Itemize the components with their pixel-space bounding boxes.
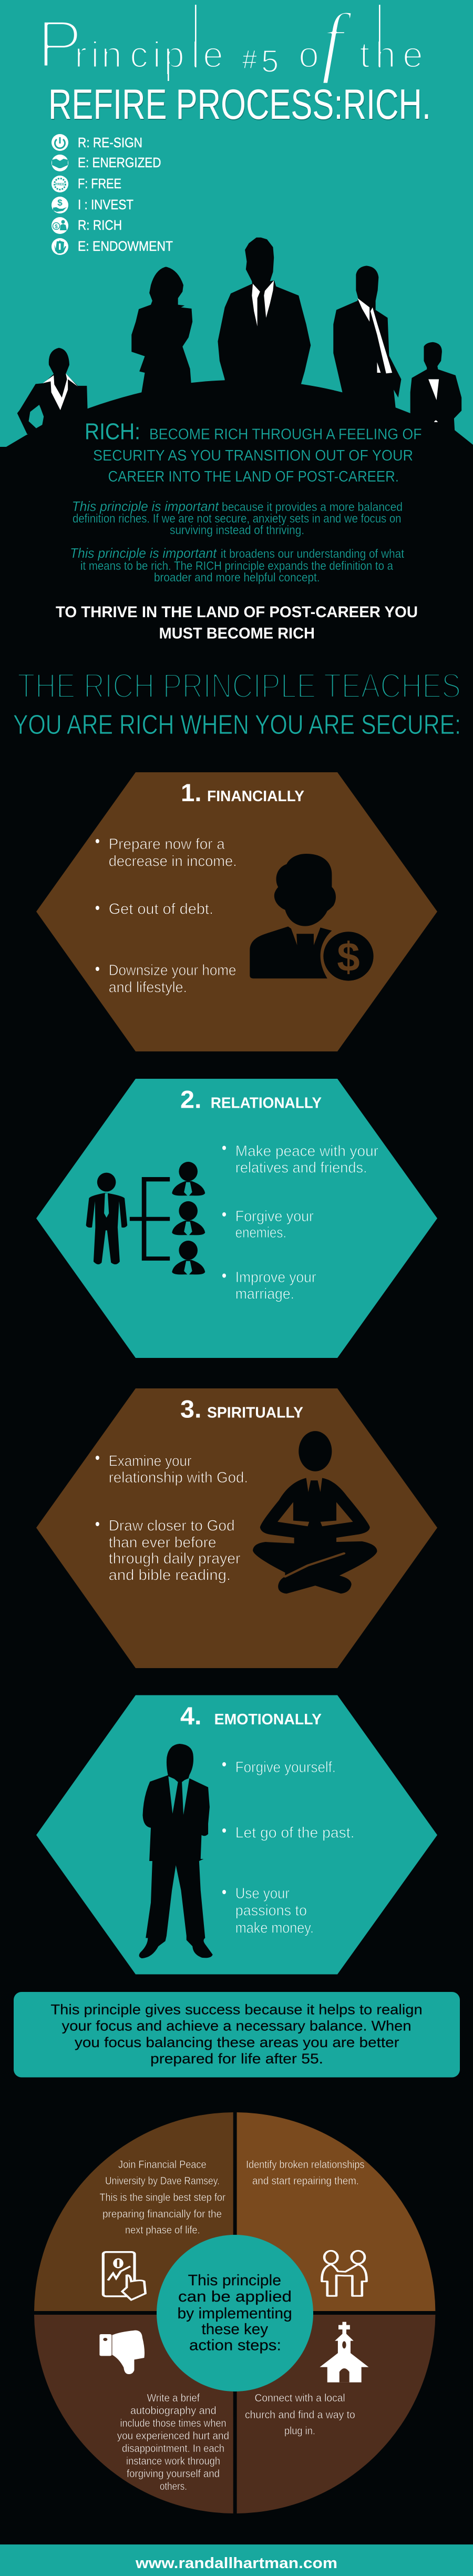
title: Principle #5 of the: n: [101, 34, 122, 75]
paragraph: why important 2: broader and more helpful concept.: [154, 570, 320, 584]
icon: standing businessman: [139, 1744, 213, 1958]
definition of RICH: BECOME RICH THROUGH A FEELING OF: [149, 426, 421, 443]
bullet list: enemies.: [235, 1224, 286, 1241]
bullet list: Downsize your home: [109, 962, 236, 979]
heading: 4.: [180, 1702, 202, 1730]
list item: re-sign: [52, 134, 142, 151]
definition of RICH: CAREER INTO THE LAND OF POST-CAREER.: [108, 468, 399, 485]
callout: gives success: your focus and achieve a necessary balance. When: [62, 2018, 411, 2033]
footer: www.randallhartman.com: [135, 2555, 337, 2572]
quadrant: financial step: next phase of life.: [125, 2225, 200, 2236]
paragraph: why important 1: surviving instead of thriving.: [170, 523, 304, 537]
centre circle: This principle: [188, 2272, 281, 2289]
bold statement: TO THRIVE IN THE LAND OF POST-CAREER YOU: [56, 604, 418, 621]
heading: FINANCIALLY: [207, 788, 304, 805]
bold statement: [56, 604, 418, 642]
definition of RICH: RICH:: [85, 419, 140, 445]
bullet list: [96, 836, 237, 996]
bold statement: MUST BECOME RICH: [159, 625, 315, 642]
paragraph: why important 2: [70, 545, 405, 584]
callout: gives success: you focus balancing these areas you are better: [75, 2035, 399, 2050]
silhouette: man right with white tie: [333, 265, 401, 418]
title: Principle #5 of the: o: [299, 34, 319, 75]
callout: gives success: [14, 1992, 460, 2078]
list item: endowment: [52, 238, 173, 255]
quadrant: financial step: This is the single best step for: [99, 2192, 225, 2204]
bullet list: Prepare now for a: [109, 836, 225, 853]
paragraph: why important 2: This principle is important: [70, 545, 218, 561]
heading: 2.: [180, 1086, 202, 1113]
icon: person meditating: [253, 1431, 377, 1593]
bullet list: Make peace with your: [235, 1143, 378, 1160]
footer: [0, 2544, 473, 2576]
silhouette: woman arms crossed: [131, 267, 192, 400]
title: Principle #5 of the: i: [152, 34, 161, 75]
list item: invest: $: [57, 198, 63, 208]
quadrant: relationship step: and start repairing them.: [252, 2175, 359, 2187]
bullet list: Improve your: [235, 1269, 316, 1286]
paragraph: why important 1: definition riches. If we are not secure, anxiety sets in and we focus on: [73, 512, 402, 525]
title: Principle #5 of the: h: [375, 34, 396, 75]
quadrant: emotional step: instance work through: [126, 2456, 220, 2467]
heading: EMOTIONALLY: [214, 1711, 322, 1728]
icon: church: [320, 2322, 368, 2383]
bullet list: and bible reading.: [109, 1567, 231, 1583]
shirt detail lower right: [434, 421, 438, 422]
quadrant: relationship step: Identify broken relationships: [246, 2159, 365, 2171]
bullet list: and lifestyle.: [109, 979, 187, 996]
panel: 2 relationally: [36, 1079, 437, 1358]
heading: [180, 1395, 303, 1423]
icon: businessman with dollar coin: $: [337, 934, 360, 980]
bullet list: [222, 1759, 354, 1937]
list item: free: F: FREE: [78, 176, 121, 191]
callout: gives success: prepared for life after 55.: [150, 2051, 323, 2067]
bullet list: through daily prayer: [109, 1550, 241, 1567]
title: Principle #5 of the: P: [37, 7, 82, 82]
paragraph: why important 1: because it provides a more balanced: [222, 500, 403, 514]
list item: rich: R: RICH: [78, 217, 122, 233]
bullet list: Let go of the past.: [235, 1824, 354, 1841]
bullet list: marriage.: [235, 1286, 294, 1303]
quadrant: spiritual step: church and find a way to: [245, 2409, 355, 2421]
quadrant: emotional step: disappointment. In each: [122, 2443, 224, 2455]
REFIRE acronym list: [52, 134, 173, 255]
bullet list: relatives and friends.: [235, 1160, 367, 1177]
quadrant: financial step: preparing financially for the: [102, 2209, 222, 2220]
list item: free: FREE: [55, 183, 65, 186]
hexagon: [36, 1388, 437, 1668]
panel: 3 spiritually: [36, 1388, 437, 1668]
list item: invest: [52, 197, 133, 213]
title: Principle #5 of the: c: [130, 34, 148, 75]
quadrant: emotional step: autobiography and: [130, 2405, 217, 2417]
title: Principle #5 of the: e: [203, 34, 223, 75]
definition of RICH: SECURITY AS YOU TRANSITION OUT OF YOUR: [93, 447, 413, 464]
icon: tablet with chart: [103, 2252, 146, 2300]
heading: SPIRITUALLY: [207, 1405, 303, 1422]
bullet list: Forgive your: [235, 1208, 314, 1225]
quadrant: emotional step: forgiving yourself and: [127, 2468, 220, 2480]
title: Principle #5 of the: #: [242, 45, 257, 74]
bullet list: Get out of debt.: [109, 901, 213, 918]
heading: 1.: [181, 779, 202, 806]
definition of RICH: [85, 419, 421, 485]
centre circle: [157, 2235, 313, 2391]
bullet list: passions to: [235, 1903, 307, 1919]
quadrant: financial step: [34, 2112, 233, 2311]
curved ground: [0, 380, 473, 473]
bullet list: Draw closer to God: [109, 1518, 235, 1535]
list item: rich: [52, 217, 122, 234]
business team silhouettes: [0, 238, 473, 473]
bullet list: Forgive yourself.: [235, 1759, 336, 1776]
list item: re-sign: R: RE-SIGN: [78, 135, 142, 150]
title: Principle #5 of the: i: [91, 34, 99, 75]
title: Principle #5 of the: 5: [261, 44, 279, 79]
title: Principle #5 of the: r: [75, 34, 87, 75]
quadrant: emotional step: Write a brief: [147, 2393, 200, 2404]
icon: man connected to three people: [86, 1162, 205, 1275]
title: Principle #5 of the: l: [191, 34, 200, 75]
centre circle: action steps:: [189, 2337, 281, 2354]
bullet list: than ever before: [109, 1534, 217, 1551]
quadrant: spiritual step: Connect with a local: [254, 2393, 345, 2404]
heading: 3.: [180, 1395, 202, 1423]
icon: two people shaking hands: [322, 2251, 366, 2296]
centre circle: by implementing: [178, 2305, 292, 2322]
quadrant: financial step: University by Dave Ramsey.: [105, 2175, 220, 2187]
centre circle: can be applied: [178, 2288, 292, 2305]
quadrant: relationship step: [237, 2112, 435, 2311]
bullet list: Use your: [235, 1885, 290, 1902]
title: Principle #5 of the: [37, 0, 423, 85]
callout: gives success: This principle gives success because it helps to realign: [50, 2001, 423, 2017]
quadrant: emotional step: include those times when: [120, 2418, 226, 2429]
bullet list: Examine your: [109, 1453, 192, 1469]
paragraph: why important 1: This principle is important: [72, 498, 220, 514]
list item: energized: [52, 155, 161, 171]
list item: free: [52, 176, 121, 192]
title: Principle #5 of the: p: [164, 34, 184, 75]
bullet list: make money.: [235, 1920, 314, 1937]
paragraph: why important 2: it means to be rich. The RICH principle expands the definition to a: [80, 559, 393, 573]
heading: RELATIONALLY: [211, 1095, 322, 1112]
paragraph: why important 1: [72, 498, 403, 537]
hexagon: [36, 1079, 437, 1358]
centre circle: these key: [202, 2321, 268, 2338]
panel: 4 emotionally: [36, 1695, 437, 1975]
heading: [180, 1086, 322, 1113]
bullet list: decrease in income.: [109, 853, 237, 870]
hexagon: [36, 772, 437, 1051]
list item: energized: E: ENERGIZED: [78, 155, 161, 170]
quadrant: emotional step: you experienced hurt and: [117, 2430, 229, 2442]
bullet list: [222, 1143, 378, 1303]
title: Principle #5 of the: t: [359, 34, 369, 75]
panel: 1 financially: [36, 772, 437, 1051]
quadrant: emotional step: [34, 2315, 233, 2513]
arm gap: [29, 405, 44, 428]
quadrant: spiritual step: plug in.: [284, 2426, 315, 2437]
quadrant: emotional step: others.: [160, 2481, 187, 2492]
quadrant: financial step: Join Financial Peace: [118, 2159, 207, 2171]
silhouette: person far right: [392, 342, 473, 450]
heading: [181, 779, 304, 806]
icon: businessman with dollar coin: [250, 854, 374, 981]
bullet list: [96, 1453, 248, 1583]
title: Principle #5 of the: e: [403, 34, 423, 75]
hexagon: [36, 1695, 437, 1975]
quadrant: spiritual step: [237, 2315, 435, 2513]
action steps circle: [34, 2112, 435, 2513]
list item: endowment: E: ENDOWMENT: [78, 238, 173, 254]
heading: [180, 1702, 322, 1730]
list item: invest: I : INVEST: [78, 197, 133, 212]
bullet list: relationship with God.: [109, 1469, 248, 1486]
silhouette: woman far left: [17, 348, 88, 434]
paragraph: why important 2: it broadens our understanding of what: [221, 547, 405, 560]
icon: thumbs down: [99, 2330, 145, 2374]
silhouette: man centre: [218, 238, 311, 392]
list item: rich: $: [55, 224, 58, 230]
